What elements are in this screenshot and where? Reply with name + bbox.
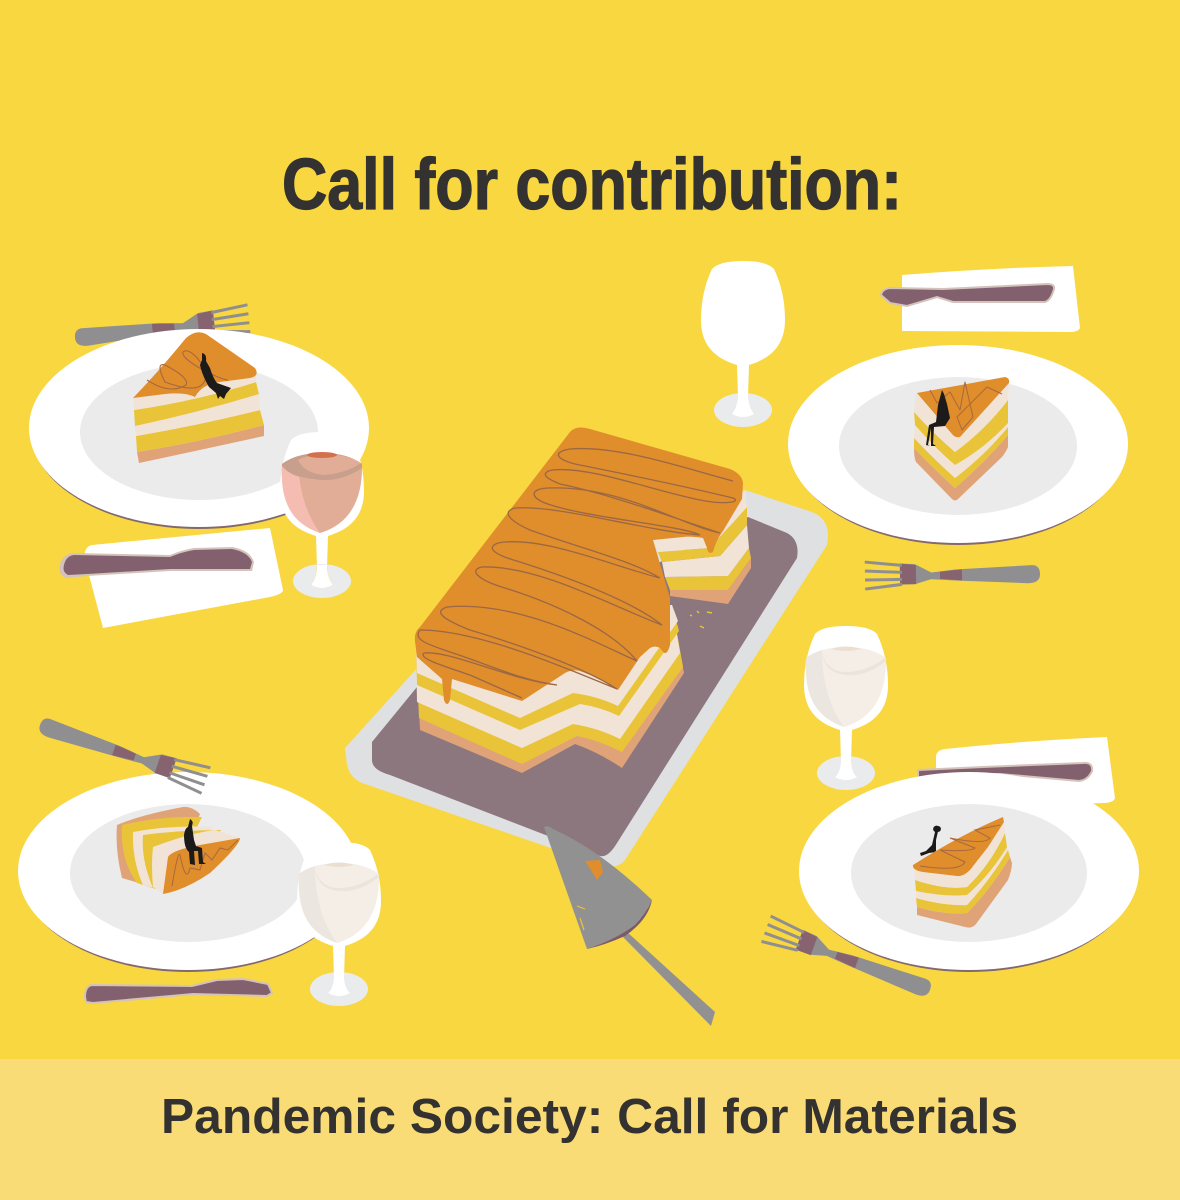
knife — [85, 979, 272, 1003]
figure — [184, 819, 206, 865]
fork: top left — [73, 305, 250, 350]
large cake — [415, 428, 751, 773]
cake slice with figure — [117, 807, 240, 894]
fork — [36, 711, 210, 793]
title: Call for contribution: — [282, 145, 902, 225]
wine glass: rose — [280, 432, 364, 598]
place setting: top right — [788, 266, 1128, 589]
wine glass: empty — [701, 261, 785, 427]
chocolate drizzle — [418, 449, 735, 698]
place setting: top left — [29, 305, 369, 628]
place setting: bottom right — [761, 737, 1139, 1001]
crumbs — [690, 611, 712, 628]
knife — [918, 763, 1092, 781]
plate — [799, 772, 1139, 972]
cake slice with figure — [914, 377, 1009, 500]
fork — [865, 559, 1040, 589]
napkin — [85, 528, 283, 628]
knife — [881, 284, 1054, 306]
figure — [920, 826, 941, 856]
knife — [59, 547, 254, 578]
plate — [29, 329, 369, 529]
fork — [761, 916, 935, 1001]
wine glass: white, right — [804, 626, 888, 790]
cake server — [544, 826, 715, 1026]
caramel icing — [415, 428, 743, 704]
cake back section — [653, 490, 751, 604]
napkin — [902, 266, 1080, 332]
wine glass: white, lower left — [297, 842, 381, 1006]
figure — [200, 353, 231, 399]
plate — [788, 345, 1128, 545]
place setting: bottom left — [18, 711, 358, 1003]
serving tray — [345, 490, 828, 867]
figure — [926, 390, 950, 446]
napkin — [936, 737, 1115, 805]
footer text: Pandemic Society: Call for Materials — [161, 1090, 1018, 1144]
cake slice with figure — [913, 817, 1012, 928]
cake slice with figure — [133, 332, 264, 463]
cake front layers — [416, 605, 684, 773]
plate — [18, 772, 358, 972]
tray inner — [372, 517, 798, 856]
footer band — [0, 1059, 1180, 1200]
